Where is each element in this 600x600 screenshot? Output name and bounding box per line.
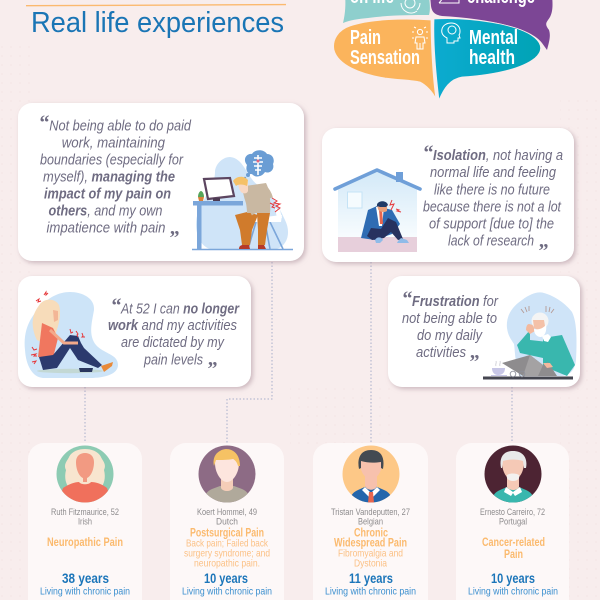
quote text: of support [due to] the xyxy=(429,216,554,232)
caption: Living with chronic pain xyxy=(325,587,416,598)
quote text: not being able to xyxy=(402,311,497,327)
caption: Living with chronic pain xyxy=(182,587,272,598)
panel: quote top left xyxy=(18,103,304,261)
card xyxy=(322,128,574,262)
card xyxy=(456,443,569,600)
card xyxy=(28,443,142,600)
panel: Ernesto profile xyxy=(456,443,569,600)
years: 10 years xyxy=(204,571,248,586)
illustration: man in house xyxy=(335,170,420,252)
closing quote mark: ” xyxy=(208,358,218,380)
bubble: teal xyxy=(343,0,430,23)
label: Mental: Mental xyxy=(469,27,518,49)
quote text: are dictated by my xyxy=(121,335,225,351)
nationality: Portugal xyxy=(499,517,527,528)
card xyxy=(170,443,284,600)
card xyxy=(313,443,428,600)
quote text: work, maintaining xyxy=(62,135,165,151)
condition line 2: Widespread Pain xyxy=(334,538,407,550)
icon: laptop xyxy=(439,0,459,3)
card xyxy=(18,276,251,387)
panel: Tristan profile xyxy=(313,443,428,600)
bubble: blue xyxy=(434,19,541,100)
icon: teal cycle xyxy=(401,0,420,13)
quote text: At 52 I can no longer xyxy=(120,301,240,317)
bubble: orange xyxy=(334,19,436,99)
illustration: man with back pain at desk xyxy=(192,150,293,250)
bubble: purple xyxy=(430,0,553,50)
quote text: activities xyxy=(416,345,466,361)
icon: head xyxy=(442,23,460,43)
quote text xyxy=(402,294,499,361)
quote text: because there is not a lot xyxy=(423,200,562,216)
quote text: impact of my pain on xyxy=(44,187,171,203)
quote text: Isolation, not having a xyxy=(433,148,563,164)
condition: Postsurgical Pain xyxy=(190,528,264,540)
name: Ernesto Carreiro, 72 xyxy=(480,507,545,518)
panel: Koert profile xyxy=(170,443,284,600)
panel: quote top right xyxy=(322,128,574,262)
panel: quote bottom left xyxy=(18,276,251,387)
label: Pain: Pain xyxy=(350,27,381,49)
name: Ruth Fitzmaurice, 52 xyxy=(51,507,119,518)
years: 10 years xyxy=(491,571,535,586)
title: Real life experiences xyxy=(31,7,284,39)
name: Koert Hommel, 49 xyxy=(197,507,257,518)
quote text: like there is no future xyxy=(434,183,550,199)
quote marks: “ xyxy=(112,295,122,317)
condition: Neuropathic Pain xyxy=(47,537,123,549)
details line 1: Fibromyalgia and xyxy=(338,548,403,560)
quote text: boundaries (especially for xyxy=(40,153,184,169)
years: 38 years xyxy=(62,571,109,586)
label: Sensation: Sensation xyxy=(350,47,420,69)
quote text: myself), managing the xyxy=(43,170,175,186)
icon: person sensation xyxy=(412,27,428,49)
quote text: Frustration for xyxy=(412,294,499,310)
nationality: Dutch xyxy=(216,517,238,528)
illustration: seated woman in pain xyxy=(25,292,118,378)
details line 3: neuropathic pain. xyxy=(194,558,260,570)
quote text: Not being able to do paid xyxy=(49,119,192,135)
avatar: Koert xyxy=(198,445,256,503)
avatar: Ruth xyxy=(56,445,114,504)
years: 11 years xyxy=(349,571,393,586)
closing quote mark: ” xyxy=(538,240,548,262)
details line 2: Dystonia xyxy=(354,558,387,570)
header rule xyxy=(26,5,286,6)
caption: Living with chronic pain xyxy=(468,587,558,598)
quote marks: “ xyxy=(424,142,434,164)
avatar: Tristan xyxy=(342,445,400,503)
quote text xyxy=(108,301,240,369)
closing quote mark: ” xyxy=(470,351,480,373)
quote text: work and my activities xyxy=(108,318,237,334)
quote marks: “ xyxy=(40,112,50,134)
panel: Ruth profile xyxy=(28,443,142,600)
quote text: pain levels xyxy=(143,353,203,369)
card xyxy=(18,103,304,261)
connector lines xyxy=(85,262,512,445)
speech bubble graphic xyxy=(334,0,553,100)
quote marks: “ xyxy=(402,288,412,310)
quote text xyxy=(423,148,563,249)
quote text: lack of research xyxy=(448,233,534,249)
nationality: Belgian xyxy=(358,517,383,528)
avatar: Ernesto xyxy=(484,445,542,503)
name: Tristan Vandeputten, 27 xyxy=(331,507,410,518)
quote text: normal life and feeling xyxy=(430,165,556,181)
details line 2: surgery syndrome; and xyxy=(184,548,270,560)
closing quote mark: ” xyxy=(170,227,180,249)
nationality: Irish xyxy=(78,517,92,528)
caption: Living with chronic pain xyxy=(40,587,130,598)
illustration: older man with headache xyxy=(483,292,577,380)
quote text: do my daily xyxy=(417,328,483,344)
condition line 1: Cancer-related xyxy=(482,537,545,549)
condition line 2: Pain xyxy=(504,549,523,561)
details line 1: Back pain; Failed back xyxy=(186,538,269,550)
quote text: impatience with pain xyxy=(46,221,166,237)
quote text xyxy=(40,119,192,237)
panel: quote bottom right xyxy=(388,276,580,387)
condition line 1: Chronic xyxy=(354,528,388,540)
quote text: others, and my own xyxy=(48,204,162,220)
label: health: health xyxy=(469,47,515,69)
card xyxy=(388,276,580,387)
